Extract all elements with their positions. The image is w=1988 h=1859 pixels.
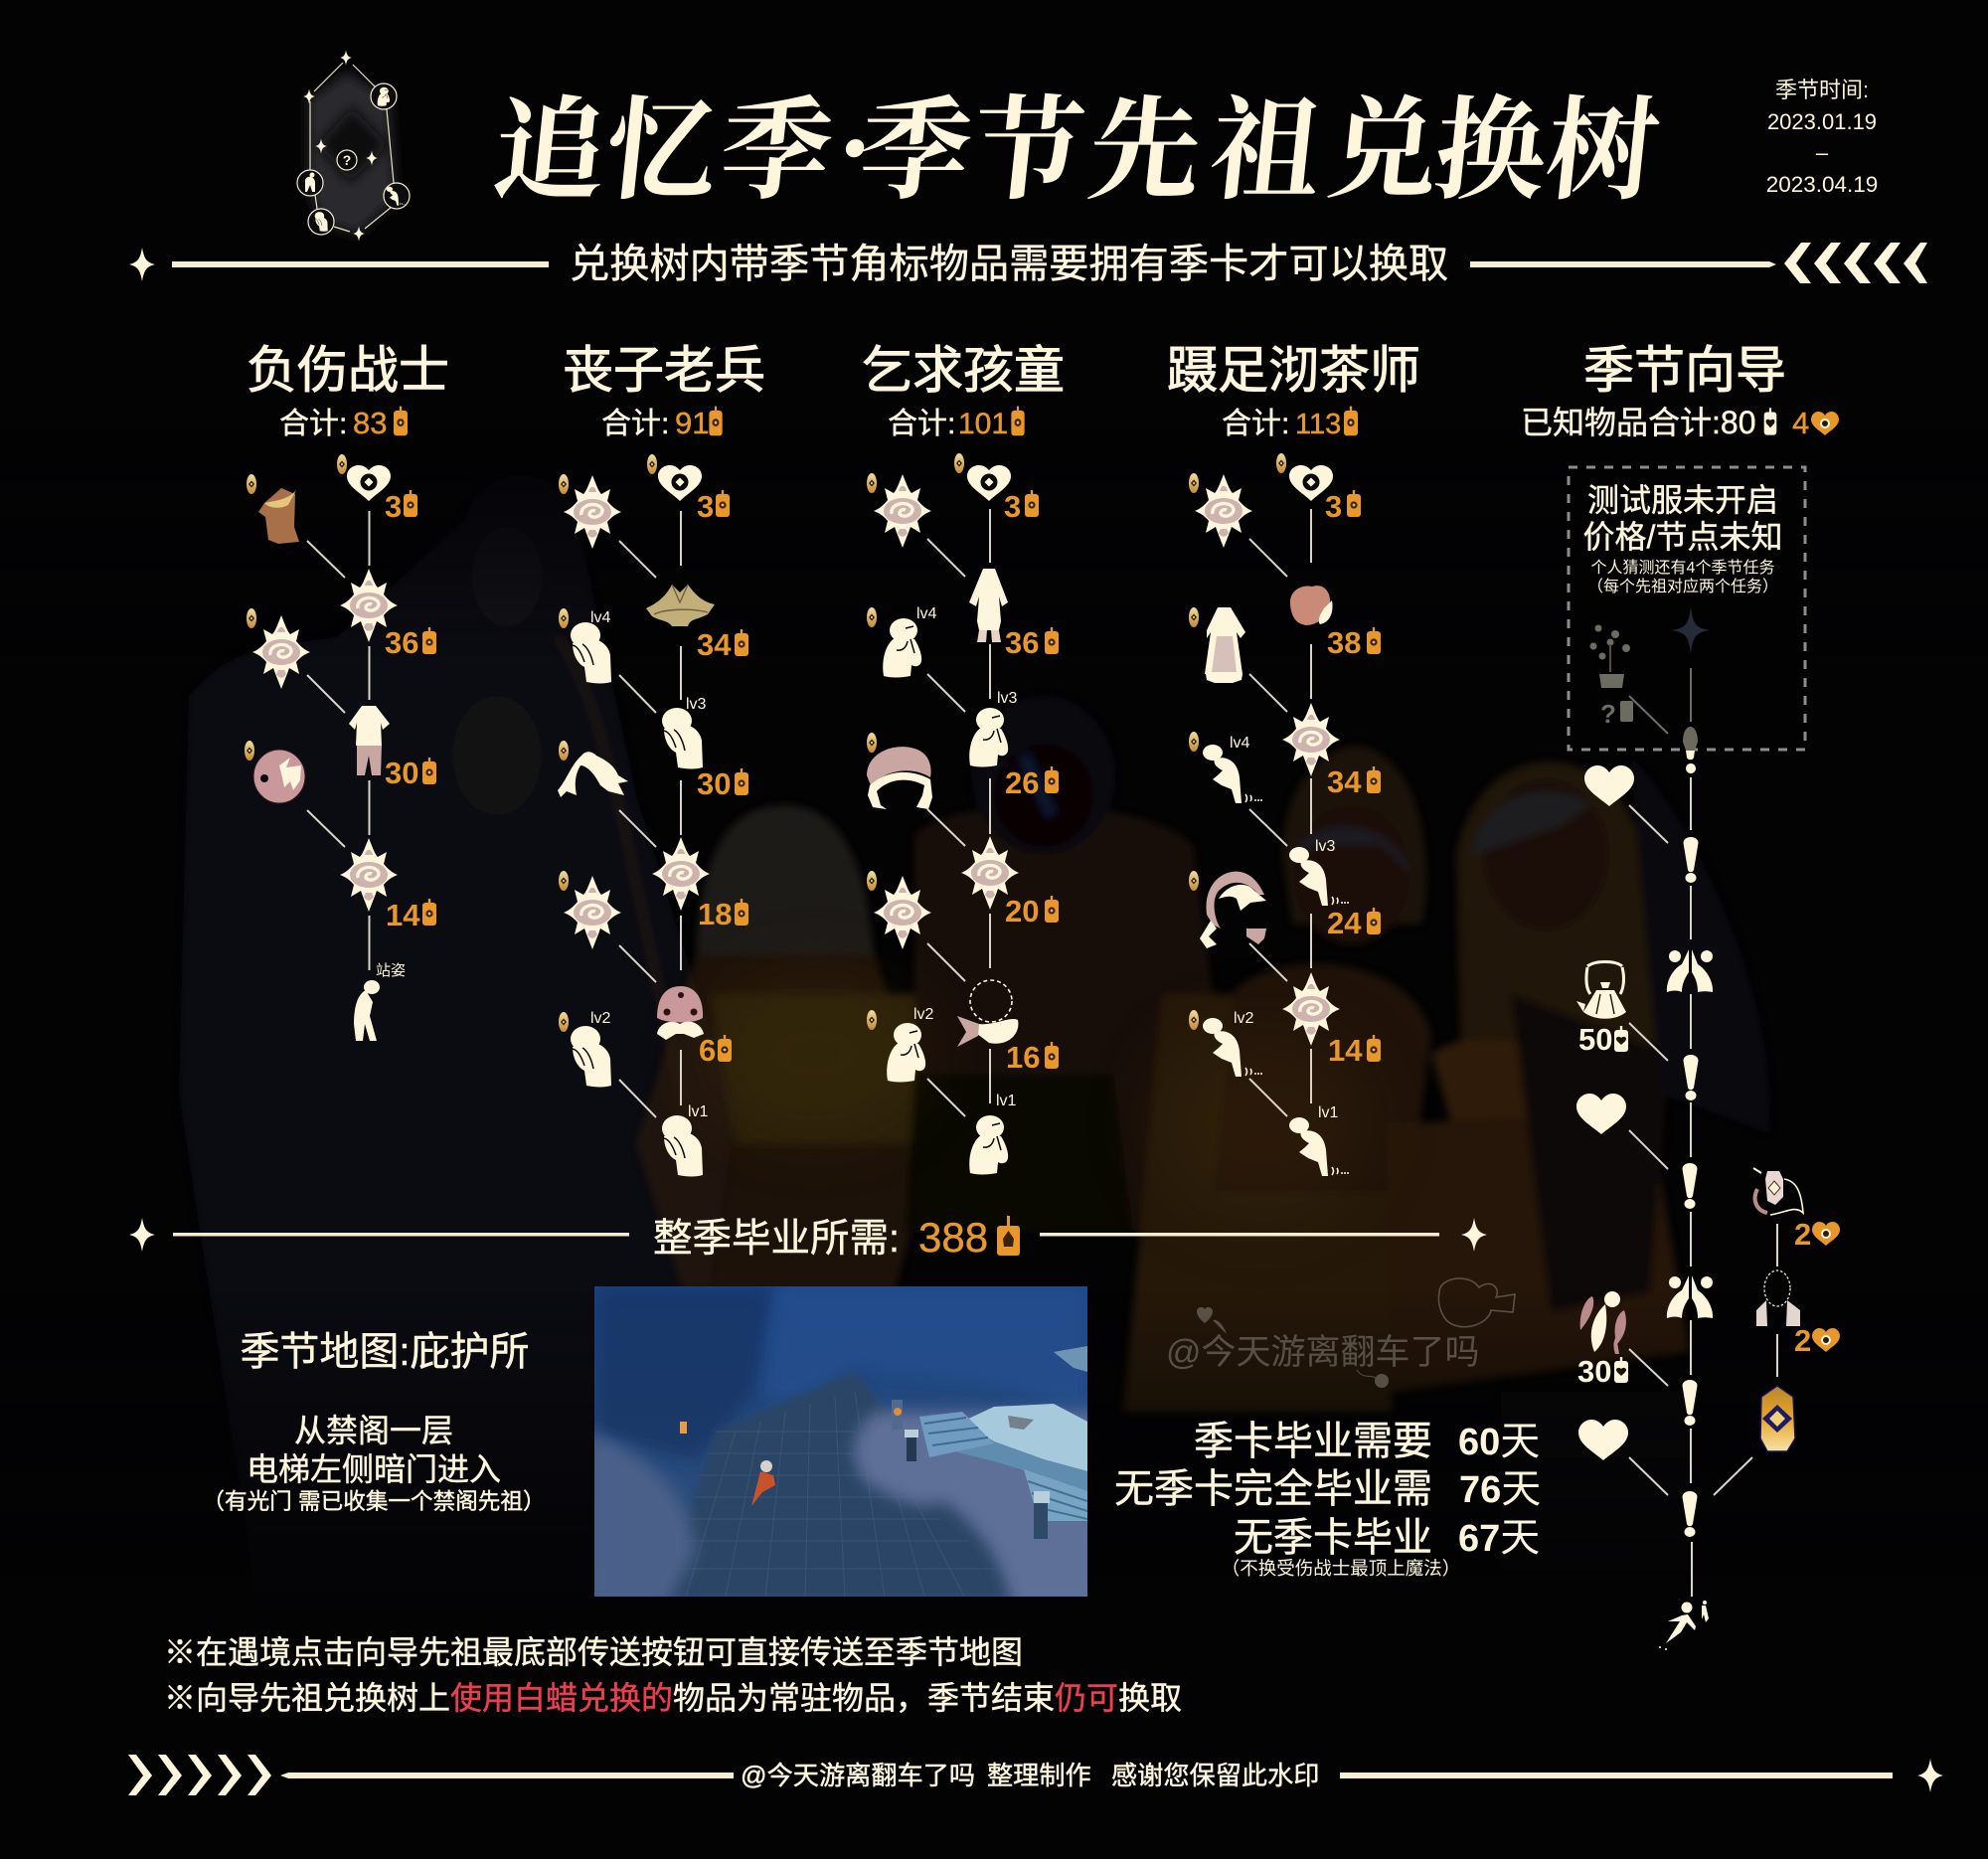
icon: two figures	[1667, 1275, 1713, 1318]
icon: headband hair	[1200, 872, 1266, 948]
icon: praying figure	[969, 708, 1008, 767]
cost 3: 3	[385, 489, 402, 524]
cost 14: 14	[386, 898, 420, 932]
icon: mask	[253, 750, 305, 803]
cost 30: 30	[385, 756, 418, 790]
season dates: –	[1816, 140, 1829, 165]
icon: beret hair	[867, 747, 932, 809]
footnotes	[164, 1634, 1182, 1716]
cost 20	[1005, 894, 1059, 929]
icon: season mark	[559, 871, 569, 891]
icon: exclamation	[1682, 1491, 1698, 1537]
total	[888, 407, 1025, 440]
season dates: 2023.01.19	[1767, 109, 1877, 134]
cost 30: 30	[697, 766, 731, 801]
cost 24: 24	[1327, 906, 1362, 940]
lv1: lv1	[996, 1093, 1017, 1109]
graduation days	[1114, 1420, 1541, 1579]
icon: heart	[347, 465, 391, 501]
cost 18: 18	[698, 897, 732, 931]
cost 36	[1005, 625, 1059, 660]
icon: scarf with dashed head	[957, 980, 1018, 1047]
total: 91	[675, 406, 709, 440]
unreleased dashed box: 价格/节点未知	[1583, 519, 1782, 555]
total: 113	[1295, 409, 1341, 440]
icon: season mark	[867, 871, 877, 891]
unreleased dashed box	[1569, 467, 1805, 751]
icon: exclamation	[1682, 1163, 1698, 1209]
icon: outfit	[349, 706, 390, 775]
icon: season mark	[1189, 871, 1199, 891]
heading: 负伤战士	[247, 342, 449, 399]
icon: season mark	[1189, 607, 1199, 627]
top divider with notice	[129, 242, 1927, 286]
icon: star	[874, 474, 931, 548]
icon: feather accessory	[1580, 1291, 1626, 1354]
cost 20: 20	[1005, 894, 1039, 929]
lv3: lv3	[997, 690, 1018, 707]
icon: star	[874, 876, 931, 949]
graduation days: 无季卡完全毕业需	[1114, 1467, 1432, 1511]
cost 34: 34	[1327, 764, 1362, 799]
icon: crouching figure	[1289, 847, 1349, 906]
icon: cape	[646, 585, 715, 626]
icon: heart	[1289, 465, 1333, 501]
cost 38: 38	[1327, 625, 1361, 660]
cost 24	[1327, 906, 1381, 940]
panel: 蹑足沏茶师	[1167, 342, 1420, 1176]
total: 合计:	[1222, 408, 1289, 440]
cost 3: 3	[1004, 489, 1021, 524]
cost 34	[1327, 764, 1381, 799]
unreleased dashed box: （每个先祖对应两个任务）	[1587, 577, 1778, 595]
panel: 负伤战士	[245, 342, 449, 1041]
lv1: lv1	[1318, 1104, 1339, 1121]
cost 36	[385, 625, 436, 660]
icon: exclamation	[1682, 1380, 1698, 1426]
icon: dashed head with shoulders	[1756, 1270, 1800, 1326]
icon: figure	[571, 1026, 611, 1088]
icon: season mark	[247, 608, 256, 628]
icon: crouching figure	[1203, 1018, 1262, 1077]
watermark: @今天游离翻车了吗	[1166, 1333, 1480, 1372]
season map text: 从禁阁一层	[294, 1413, 453, 1448]
cost 38	[1327, 625, 1381, 660]
icon: cape	[258, 488, 299, 544]
lv2: lv2	[913, 1006, 934, 1023]
top divider with notice: 兑换树内带季节角标物品需要拥有季卡才可以换取	[570, 242, 1448, 286]
icon: season mark	[559, 608, 569, 628]
icon: season mark	[247, 474, 256, 494]
icon: flowing hair	[558, 752, 628, 797]
cost 30	[697, 766, 748, 801]
cost 34: 34	[697, 627, 732, 662]
icon: golden lantern	[1760, 1386, 1795, 1451]
icon: crouching figure	[1203, 745, 1262, 803]
icon: praying figure	[887, 1023, 925, 1082]
bottom credit bar: 感谢您保留此水印	[1111, 1761, 1320, 1790]
icon: heart	[967, 465, 1011, 501]
cost 18	[698, 897, 748, 931]
total: 4	[1792, 406, 1809, 440]
cost 14	[1328, 1033, 1381, 1068]
cost 36: 36	[1005, 625, 1039, 660]
cost 3: 3	[697, 489, 714, 524]
bottom credit bar: 整理制作	[987, 1761, 1091, 1790]
panel: 丧子老兵	[558, 342, 765, 1177]
icon: heart	[658, 465, 702, 501]
watermark	[1166, 1278, 1515, 1388]
lv2: lv2	[1234, 1010, 1254, 1027]
icon: season mark	[1189, 1010, 1199, 1030]
total: 83	[353, 406, 387, 440]
icon: two figures	[1667, 949, 1713, 992]
icon: outfit	[969, 569, 1008, 642]
season map text: （有光门 需已收集一个禁阁先祖）	[202, 1489, 546, 1514]
bottom credit bar	[128, 1755, 1943, 1795]
icon: season mark	[867, 473, 877, 493]
icon: peach hair	[1290, 586, 1332, 625]
total	[1222, 407, 1358, 440]
season map text: 电梯左侧暗门进入	[247, 1451, 501, 1487]
connector lines	[1249, 509, 1311, 1116]
cost 2 hearts: 2	[1794, 1217, 1811, 1252]
icon: flying figure with child	[1659, 1601, 1709, 1650]
icon: season mark	[559, 474, 569, 494]
heading: 季节向导	[1583, 342, 1786, 399]
icon: star	[564, 475, 621, 549]
icon: exclamation	[1684, 837, 1698, 883]
lv2: lv2	[590, 1010, 611, 1027]
lv4: lv4	[1230, 735, 1250, 752]
connector lines	[1629, 777, 1777, 1597]
graduation days: 76天	[1459, 1467, 1541, 1511]
icon: seasonal constellation: ?	[343, 152, 351, 168]
season map screenshot	[586, 1286, 1103, 1610]
icon: star	[340, 838, 398, 912]
connector lines	[307, 511, 370, 970]
panel: 季节向导	[1521, 342, 1840, 1650]
icon: season mark	[1189, 473, 1199, 493]
icon: star	[961, 836, 1019, 910]
graduation days: 无季卡毕业	[1234, 1516, 1432, 1560]
icon: star	[564, 876, 621, 949]
heading: 蹑足沏茶师	[1167, 342, 1420, 399]
middle divider with total: 整季毕业所需:	[653, 1217, 900, 1261]
total	[601, 406, 723, 440]
cost 3	[385, 489, 417, 524]
cost 34	[697, 627, 748, 662]
cost 14: 14	[1328, 1033, 1363, 1068]
icon: figure	[662, 708, 703, 769]
icon: exclamation	[1684, 1055, 1698, 1100]
icon: season mark	[559, 1012, 569, 1032]
graduation days: 60天	[1458, 1420, 1540, 1463]
icon: figure	[571, 622, 611, 684]
icon: season mark	[954, 453, 964, 473]
connector lines	[619, 511, 681, 1117]
stance label: 站姿	[376, 962, 406, 979]
icon: season mark	[867, 1010, 877, 1030]
cost 3	[1004, 489, 1039, 524]
season map text: 季节地图:庇护所	[240, 1330, 530, 1374]
total	[279, 406, 408, 440]
total: 合计:	[601, 408, 669, 440]
cost 30	[1577, 1354, 1628, 1389]
cost 3: 3	[1325, 489, 1342, 524]
unreleased dashed box: 个人猜测还有4个季节任务	[1591, 559, 1774, 577]
icon: star	[252, 615, 310, 689]
middle divider with total	[129, 1214, 1487, 1261]
icon: star	[1282, 972, 1340, 1046]
title: 追忆季·季节先祖兑换树	[488, 62, 1667, 222]
lv3: lv3	[686, 696, 707, 713]
cost 30: 30	[1577, 1354, 1611, 1389]
footnotes: ※向导先祖兑换树上使用白蜡兑换的物品为常驻物品，季节结束仍可换取	[164, 1680, 1182, 1716]
footnotes: ※在遇境点击向导先祖最底部传送按钮可直接传送至季节地图	[164, 1634, 1023, 1670]
icon: season mark	[867, 607, 877, 627]
cost 26	[1005, 765, 1059, 800]
graduation days: 季卡毕业需要	[1194, 1420, 1432, 1463]
icon: star	[1282, 703, 1340, 776]
season dates	[1766, 78, 1878, 197]
lv4: lv4	[590, 609, 611, 626]
icon: mushroom hair	[657, 986, 704, 1040]
icon: season mark	[245, 741, 254, 760]
total: 已知物品合计:80	[1521, 405, 1755, 440]
cost 30	[385, 756, 436, 790]
icon: crouching figure	[1289, 1117, 1349, 1176]
cost 26: 26	[1005, 765, 1039, 800]
total: 101	[958, 408, 1008, 440]
cost 3	[1325, 489, 1361, 524]
icon: star	[652, 837, 710, 911]
lv3: lv3	[1315, 838, 1336, 855]
icon: heart	[1578, 1420, 1628, 1460]
graduation days: 67天	[1458, 1516, 1540, 1560]
icon: mask pendant	[1753, 1168, 1803, 1215]
icon: teapot	[1576, 962, 1626, 1019]
cost 3	[697, 489, 730, 524]
cost 16: 16	[1006, 1040, 1040, 1075]
icon: stance figure	[354, 980, 380, 1041]
icon: season mark	[559, 741, 569, 760]
cost 6: 6	[699, 1033, 716, 1068]
icon: season mark	[647, 454, 657, 474]
icon: heart	[1576, 1094, 1626, 1134]
cost 2 hearts: 2	[1794, 1323, 1811, 1358]
middle divider with total: 388	[918, 1214, 988, 1261]
connector lines	[927, 509, 990, 1116]
graduation days: （不换受伤战士最顶上魔法）	[1222, 1558, 1460, 1579]
cost 50: 50	[1578, 1022, 1612, 1057]
total: 合计:	[279, 408, 347, 440]
unreleased dashed box: 测试服未开启	[1587, 482, 1778, 518]
lv1: lv1	[688, 1103, 709, 1120]
icon: exclamation tail	[1686, 751, 1696, 773]
heading: 丧子老兵	[563, 342, 765, 399]
icon: seasonal constellation	[297, 50, 410, 242]
icon: season mark	[867, 733, 877, 753]
cost 14	[386, 898, 436, 932]
icon: season mark	[1276, 453, 1286, 473]
season map text	[202, 1330, 546, 1514]
icon: star	[1195, 474, 1252, 548]
cost 36: 36	[385, 625, 418, 660]
heading: 乞求孩童	[862, 342, 1065, 399]
cost 16	[1006, 1040, 1059, 1075]
icon: heart	[1584, 765, 1634, 806]
cost 2 hearts	[1794, 1217, 1840, 1252]
icon: season mark	[1189, 732, 1199, 752]
icon: praying figure	[969, 1115, 1008, 1175]
cost 6	[699, 1033, 732, 1068]
season dates: 季节时间:	[1775, 78, 1869, 102]
total: 合计:	[888, 408, 955, 440]
cost 2 hearts	[1794, 1323, 1840, 1358]
lv4: lv4	[916, 605, 937, 622]
icon: long robe	[1205, 607, 1245, 683]
icon: figure	[662, 1115, 703, 1177]
icon: season mark	[337, 454, 347, 474]
cost 50	[1578, 1022, 1628, 1057]
unreleased dashed box: ?	[1600, 699, 1616, 729]
bottom credit bar: @今天游离翻车了吗	[741, 1761, 975, 1790]
icon: praying figure	[883, 618, 921, 678]
season dates: 2023.04.19	[1766, 172, 1878, 197]
panel: 乞求孩童	[862, 342, 1065, 1175]
icon: star	[340, 569, 398, 642]
